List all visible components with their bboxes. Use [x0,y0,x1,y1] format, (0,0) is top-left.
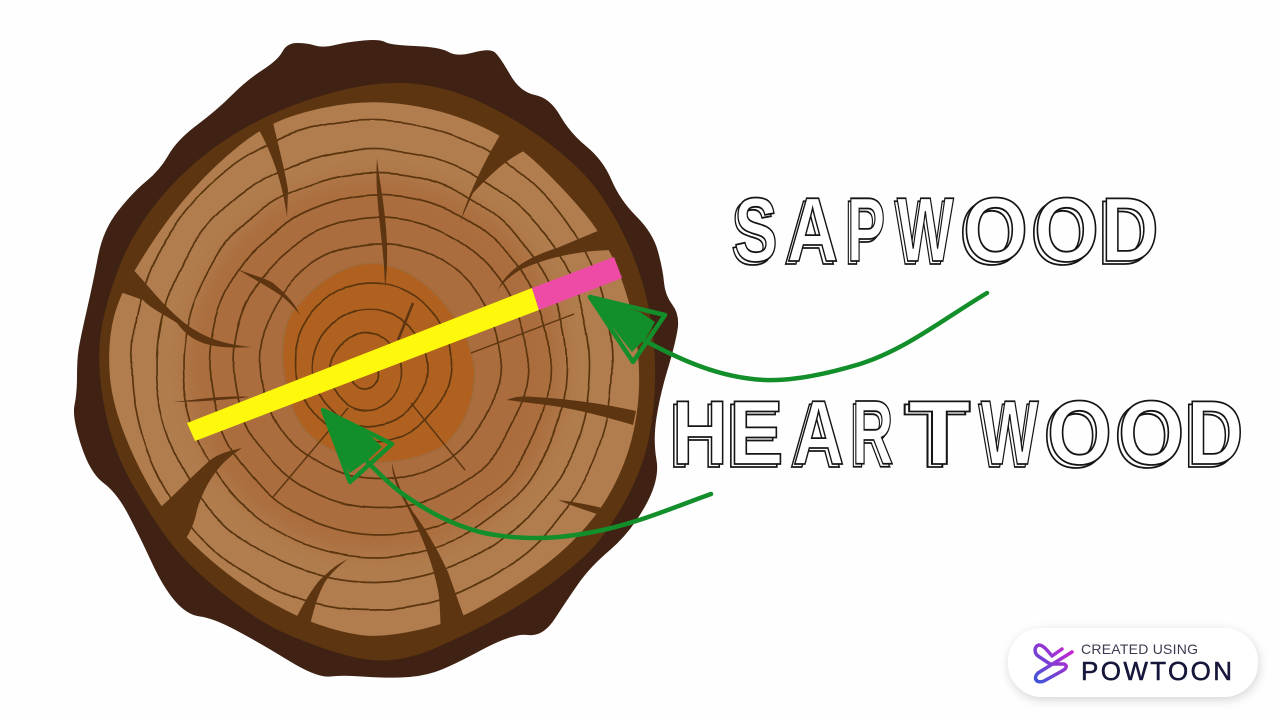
label: HEARTWOOD: T [908,383,971,484]
icon: Powtoon logo [1035,645,1072,682]
label: HEARTWOOD: A [793,383,844,484]
label: SAPWOOD: S [734,180,778,281]
label: HEARTWOOD: H [672,383,728,484]
badge background [1008,628,1258,697]
label: HEARTWOOD: R [852,383,893,484]
label: SAPWOOD: A [787,180,838,281]
arrow: heartwood to bar [323,410,711,538]
arrow: sapwood to bar [590,293,987,380]
label: HEARTWOOD: O [1047,383,1112,484]
outer bark [74,40,678,678]
sapwood bar [532,257,622,310]
badge wordmark: POWTOON [1081,656,1232,686]
heartwood outer band [185,175,565,555]
label: SAPWOOD [732,180,1159,281]
label: SAPWOOD: W [897,180,954,281]
Powtoon badge [1008,628,1258,697]
label: HEARTWOOD: D [1187,383,1244,484]
heartwood bar [187,288,539,441]
label: HEARTWOOD: O [1118,383,1185,484]
label: SAPWOOD: P [847,180,885,281]
heartwood core [282,263,475,462]
label: SAPWOOD: O [963,180,1028,281]
badge caption: CREATED USING [1081,641,1198,657]
sapwood [109,102,639,636]
growth rings [132,120,612,610]
tree cross-section [74,40,678,678]
sapwood ring border [99,83,655,660]
label: HEARTWOOD: E [729,383,784,484]
cracks [120,118,636,634]
label: SAPWOOD: O [1034,180,1099,281]
label: SAPWOOD: D [1101,180,1159,281]
label: HEARTWOOD [672,383,1244,484]
label: HEARTWOOD: W [981,383,1039,484]
